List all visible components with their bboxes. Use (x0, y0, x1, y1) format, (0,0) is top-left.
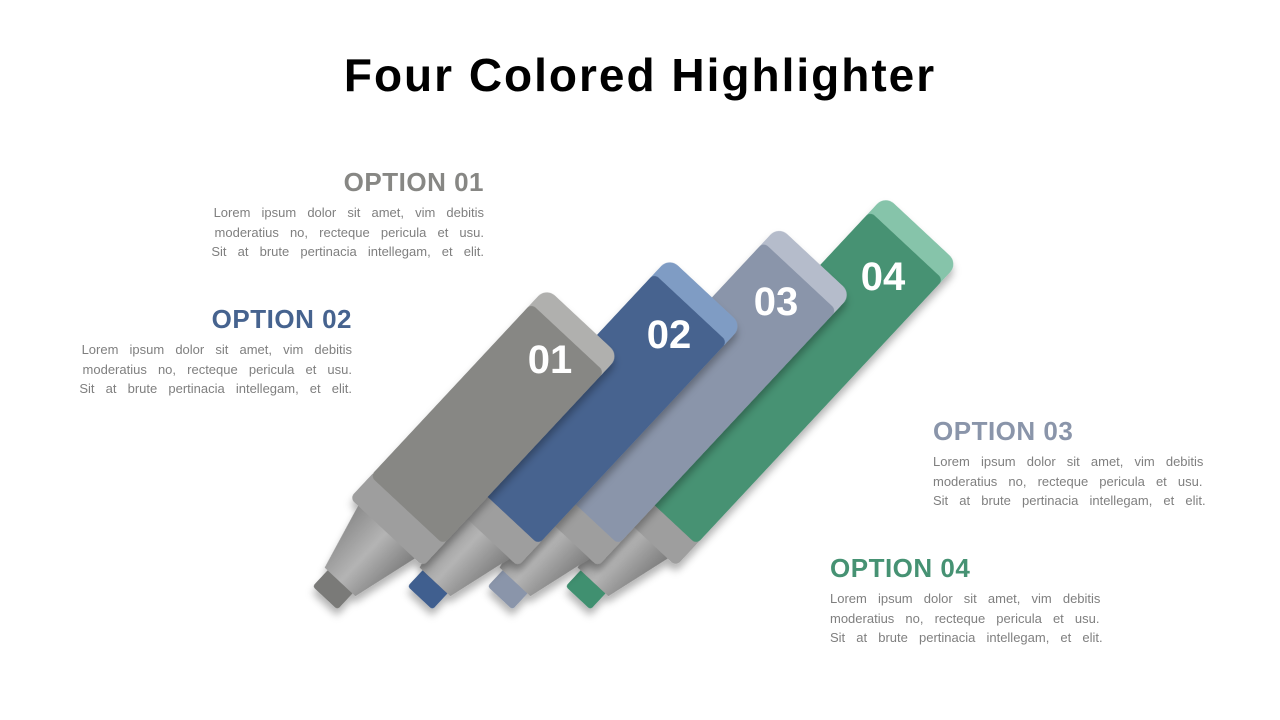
option 02 text: moderatius no, recteque pericula et usu. (83, 362, 352, 376)
number labels (528, 255, 906, 382)
option 04 text: OPTION 04 (830, 553, 970, 583)
option 02 text: OPTION 02 (212, 304, 352, 334)
number labels: 02 (647, 313, 691, 357)
highlighter 01 (288, 287, 619, 632)
highlighter 04 (541, 195, 958, 632)
option 01 text (211, 167, 484, 259)
number labels: 01 (528, 338, 572, 382)
option 03 text: Lorem ipsum dolor sit amet, vim debitis (933, 454, 1203, 469)
option 03 text (933, 416, 1206, 508)
option 02 text: Lorem ipsum dolor sit amet, vim debitis (82, 342, 352, 357)
option 02 text (79, 304, 352, 396)
option 04 text: moderatius no, recteque pericula et usu. (830, 610, 1099, 626)
highlighter 03 (463, 226, 852, 632)
option 01 text: Sit at brute pertinacia intellegam, et elit. (211, 244, 484, 259)
title: Four Colored Highlighter (344, 49, 936, 101)
number labels: 04 (861, 255, 906, 299)
option 03 text: OPTION 03 (933, 416, 1073, 446)
number labels: 03 (754, 280, 798, 324)
option 04 text: Lorem ipsum dolor sit amet, vim debitis (830, 591, 1100, 606)
option 04 text (830, 553, 1103, 645)
option 01 text: OPTION 01 (344, 167, 484, 197)
option 02 text: Sit at brute pertinacia intellegam, et elit. (79, 381, 352, 396)
option 01 text: moderatius no, recteque pericula et usu. (215, 224, 484, 240)
highlighter 02 (383, 257, 742, 632)
option 04 text: Sit at brute pertinacia intellegam, et elit. (830, 630, 1103, 645)
option 03 text: Sit at brute pertinacia intellegam, et elit. (933, 493, 1206, 508)
option 01 text: Lorem ipsum dolor sit amet, vim debitis (214, 205, 484, 220)
option 03 text: moderatius no, recteque pericula et usu. (933, 474, 1202, 488)
